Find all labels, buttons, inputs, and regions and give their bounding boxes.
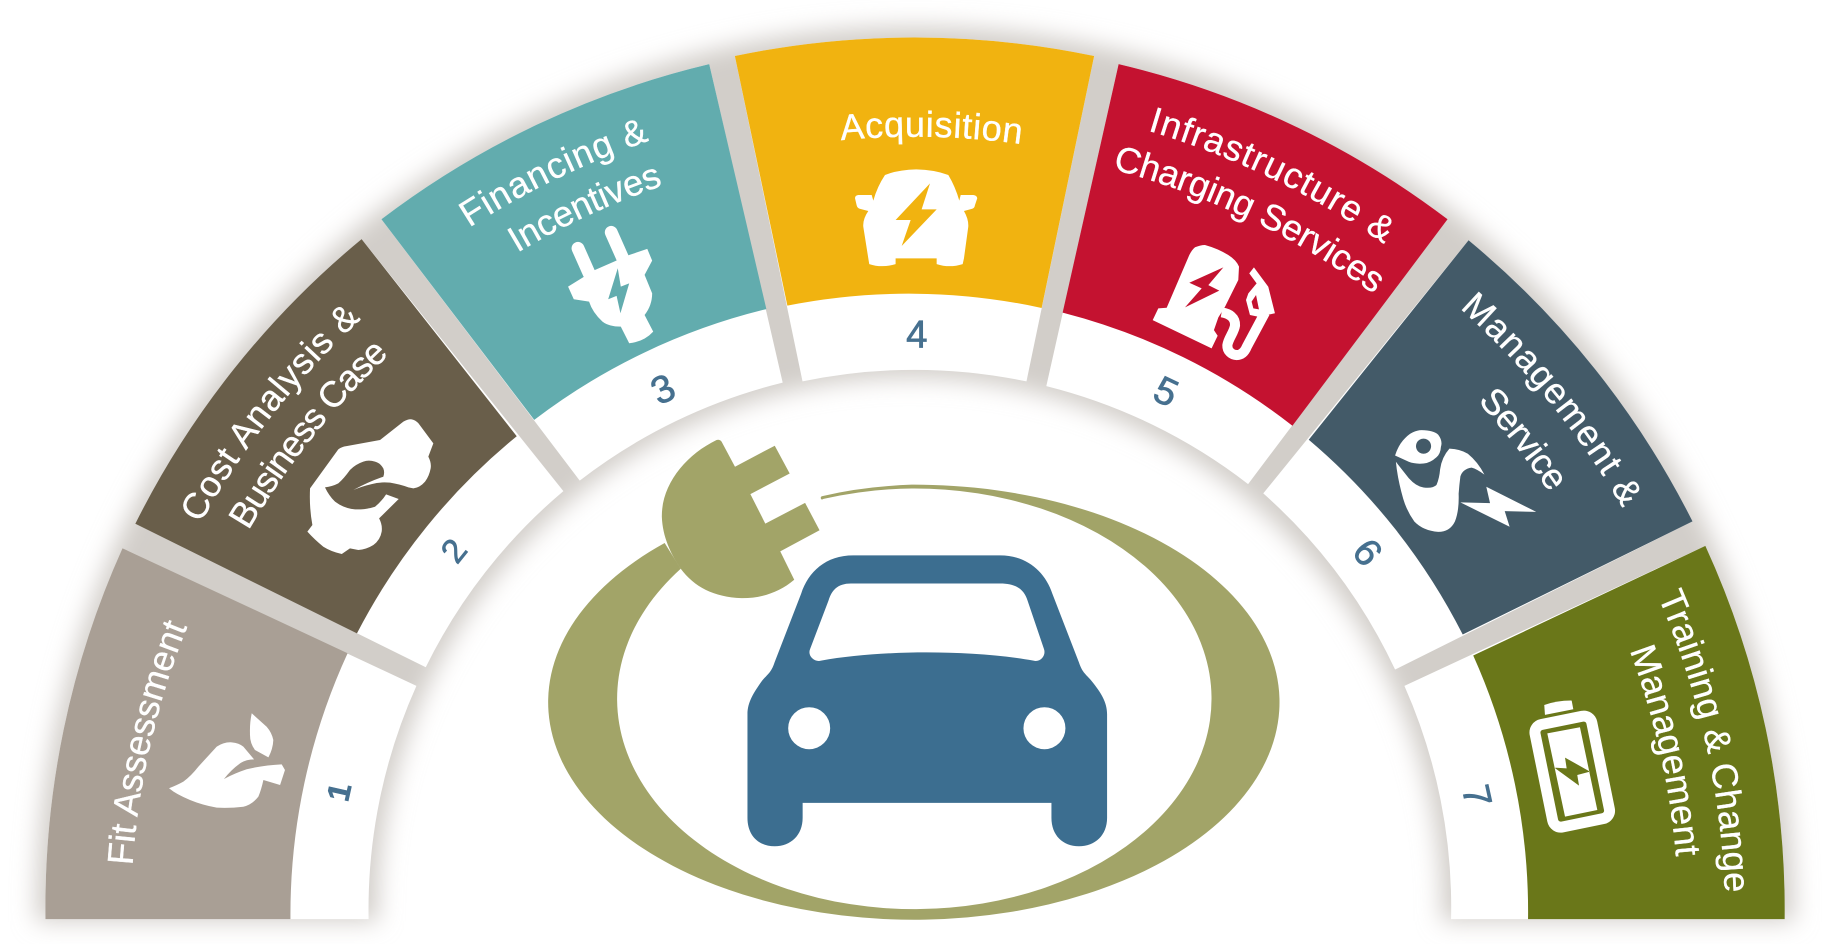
icon: leaves xyxy=(169,713,285,808)
label: infrastructure: Infrastructure & xyxy=(1150,108,1392,244)
panel: step 7 training xyxy=(1404,546,1785,920)
number 1: 1 xyxy=(319,779,358,804)
plug xyxy=(662,440,820,598)
panel: step 4 acquisition xyxy=(734,38,1094,382)
label: service: Service xyxy=(1482,389,1562,490)
number 3: 3 xyxy=(644,366,682,414)
swoosh ring xyxy=(548,485,1280,920)
icon: charging station xyxy=(1153,245,1275,355)
panel: step 6 management xyxy=(1263,240,1692,670)
panel: step 5 infrastructure xyxy=(1046,64,1448,484)
label: business case: Business Case xyxy=(228,344,386,528)
central logo: electric car with plug xyxy=(548,440,1280,920)
icon: plug xyxy=(568,232,653,343)
label: financing: Financing & xyxy=(458,120,649,226)
panel: step 2 cost analysis xyxy=(135,239,564,668)
number 7: 7 xyxy=(1453,781,1500,811)
icon: hand with leaf xyxy=(307,419,433,554)
panel: step 1 fit assessment xyxy=(46,548,416,920)
label: training and change: Training & Change xyxy=(1661,587,1744,891)
number 4: 4 xyxy=(906,314,928,357)
car xyxy=(747,555,1107,846)
icon: battery xyxy=(1533,701,1611,829)
icon: electric car xyxy=(855,169,977,266)
icon: service figure xyxy=(1395,430,1536,532)
panel: step 3 financing xyxy=(382,64,783,480)
label: incentives: Incentives xyxy=(507,169,661,252)
label: management: Management & xyxy=(1462,292,1640,508)
label: fit assessment: Fit Assessment xyxy=(108,620,188,863)
label: charging services: Charging Services xyxy=(1116,148,1382,292)
label: management: Management xyxy=(1630,644,1700,857)
label: acquisition: Acquisition xyxy=(840,110,1021,144)
number 2: 2 xyxy=(434,532,475,570)
number 6: 6 xyxy=(1344,531,1391,575)
label: cost analysis: Cost Analysis & xyxy=(183,307,361,518)
number 5: 5 xyxy=(1147,368,1185,416)
headlights xyxy=(788,707,1065,749)
